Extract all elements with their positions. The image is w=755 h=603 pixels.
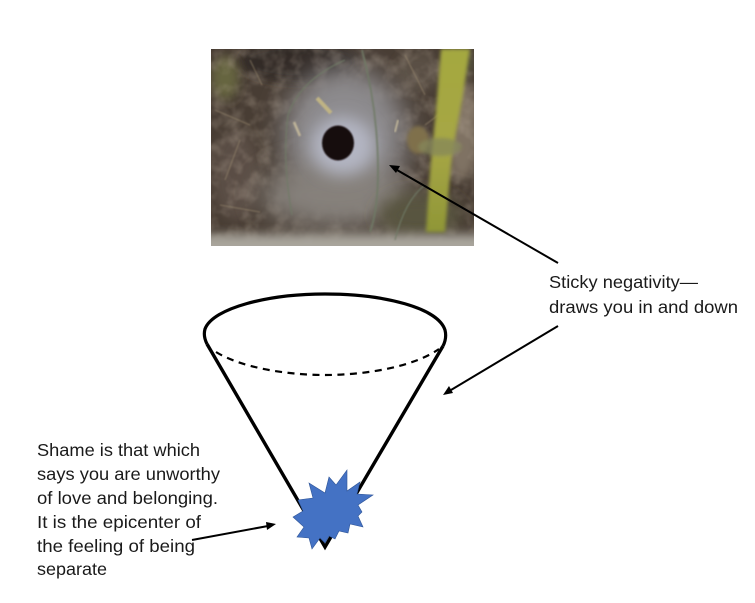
photo: funnel web with dark hole [211, 49, 474, 246]
text: shame definition: Shame is that which [37, 440, 200, 460]
funnel dashed rear rim [216, 349, 439, 375]
text: shame definition [37, 440, 220, 579]
text: sticky negativity label: Sticky negativity— [549, 272, 699, 292]
text: shame definition: separate [37, 559, 107, 579]
text: shame definition: the feeling of being [37, 536, 195, 556]
arrow: sticky negativity to web photo [389, 165, 558, 263]
text: shame definition: It is the epicenter of [37, 512, 201, 532]
funnel rim [204, 294, 446, 346]
text: shame definition: says you are unworthy [37, 464, 220, 484]
icon: blue starburst [293, 470, 373, 549]
arrow: shame to starburst [192, 522, 276, 540]
text: sticky negativity label: draws you in and down [549, 297, 738, 317]
text: shame definition: of love and belonging. [37, 488, 218, 508]
arrow: sticky negativity to funnel [443, 326, 558, 395]
funnel cone [204, 294, 446, 547]
text: sticky negativity label [549, 272, 738, 317]
funnel sides [207, 344, 443, 547]
